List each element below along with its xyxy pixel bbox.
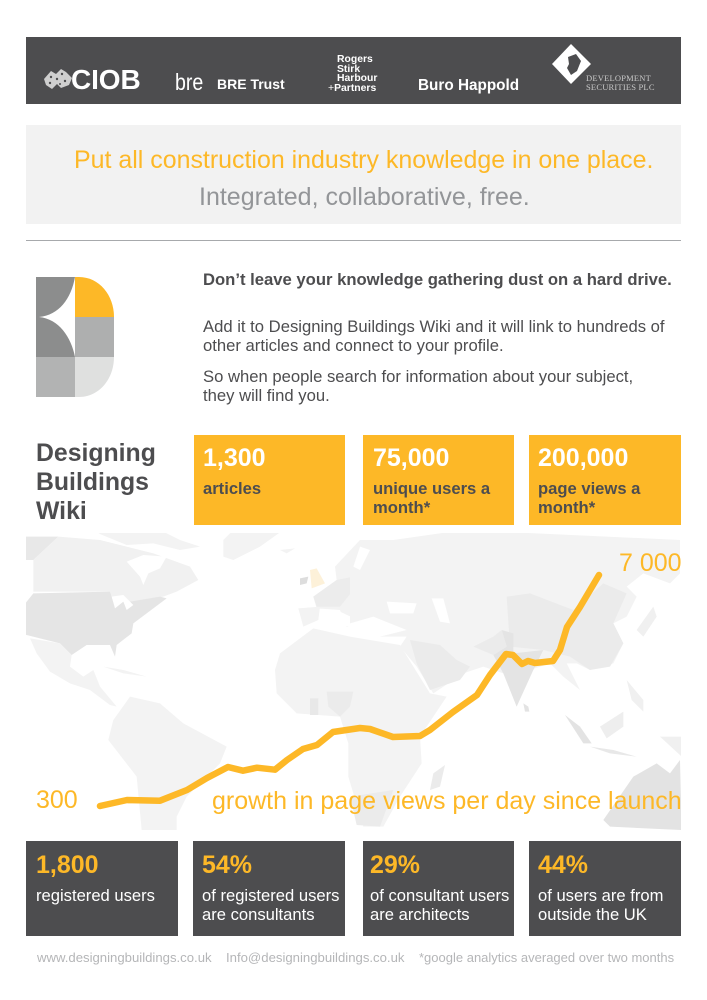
icon: CIOB crest [44,69,72,89]
title [36,440,156,525]
tagline panel [26,125,681,224]
world map with growth line [26,533,681,830]
stat: page views: 200,000 [538,444,628,472]
logo: Buro Happold: Buro Happold [418,77,519,94]
stat: registered users [26,841,178,936]
stat: outside UK: 44% [538,851,588,879]
stat: articles [194,435,345,525]
stat: architects: of consultant users [370,886,509,905]
logo: Development Securities [552,44,655,92]
title: Buildings [36,469,149,496]
tagline line 1: Put all construction industry knowledge in one place. [74,146,653,174]
stat: consultants: 54% [202,851,252,879]
header logo bar [26,37,681,104]
logo: bre: bre [175,69,203,95]
title: Designing [36,440,156,467]
stat: articles: 1,300 [203,444,266,472]
stat: unique users: unique users a [373,479,490,498]
stat: architects [363,841,514,936]
logo: Rogers Stirk Harbour + Partners: Harbour [337,73,377,84]
stat: page views: page views a [538,479,640,498]
stat: registered users: registered users [36,886,155,905]
footer: website: www.designingbuildings.co.uk [37,950,212,965]
stat: architects: 29% [370,851,420,879]
intro paragraph 2: they will find you. [203,386,330,405]
stat: page views [529,435,681,525]
stat: consultants: of registered users [202,886,339,905]
intro paragraph 1: other articles and connect to your profile. [203,336,504,355]
growth line [100,575,599,806]
intro heading: Don’t leave your knowledge gathering dust on a hard drive. [203,270,672,289]
text: Development Securities PLC: SECURITIES PLC [586,82,655,92]
text: Development Securities PLC: DEVELOPMENT [586,73,651,83]
stat: consultants [193,841,345,936]
logo: BRE Trust: BRE Trust [217,76,285,92]
logo: Rogers Stirk Harbour + Partners: Rogers [337,54,373,65]
stat: consultants: are consultants [202,905,315,924]
stat: unique users [363,435,514,525]
logo: Rogers Stirk Harbour + Partners [328,54,378,94]
stat: registered users: 1,800 [36,851,99,879]
title: Wiki [36,498,87,525]
intro paragraph 1 [203,317,665,355]
intro paragraph 1: Add it to Designing Buildings Wiki and it will link to hundreds of [203,317,665,336]
logo: CIOB: CIOB [71,64,141,95]
text: Development Securities PLC [586,73,655,92]
icon: diamond [552,44,591,84]
stat: unique users: month* [373,498,430,517]
intro paragraph 2 [203,367,633,405]
stat: outside UK: of users are from [538,886,663,905]
stat: articles: articles [203,479,261,498]
intro paragraph 2: So when people search for information about your subject, [203,367,633,386]
stat: page views: month* [538,498,595,517]
icon: Designing Buildings Wiki logo [36,277,114,397]
logo: Rogers Stirk Harbour + Partners: Stirk [337,64,360,74]
stat: outside UK [529,841,681,936]
stat: outside UK: outside the UK [538,905,647,924]
logo: Rogers Stirk Harbour + Partners: +Partners [328,82,376,94]
tagline line 2: Integrated, collaborative, free. [199,183,530,211]
stat: architects: are architects [370,905,470,924]
label: growth caption: growth in page views per day since launch [212,787,682,815]
label: 300: 300 [36,786,78,814]
footer: note: *google analytics averaged over two months [419,950,674,965]
label: 7 000: 7 000 [619,549,682,577]
footer: email: Info@designingbuildings.co.uk [226,950,404,965]
stat: unique users: 75,000 [373,444,449,472]
